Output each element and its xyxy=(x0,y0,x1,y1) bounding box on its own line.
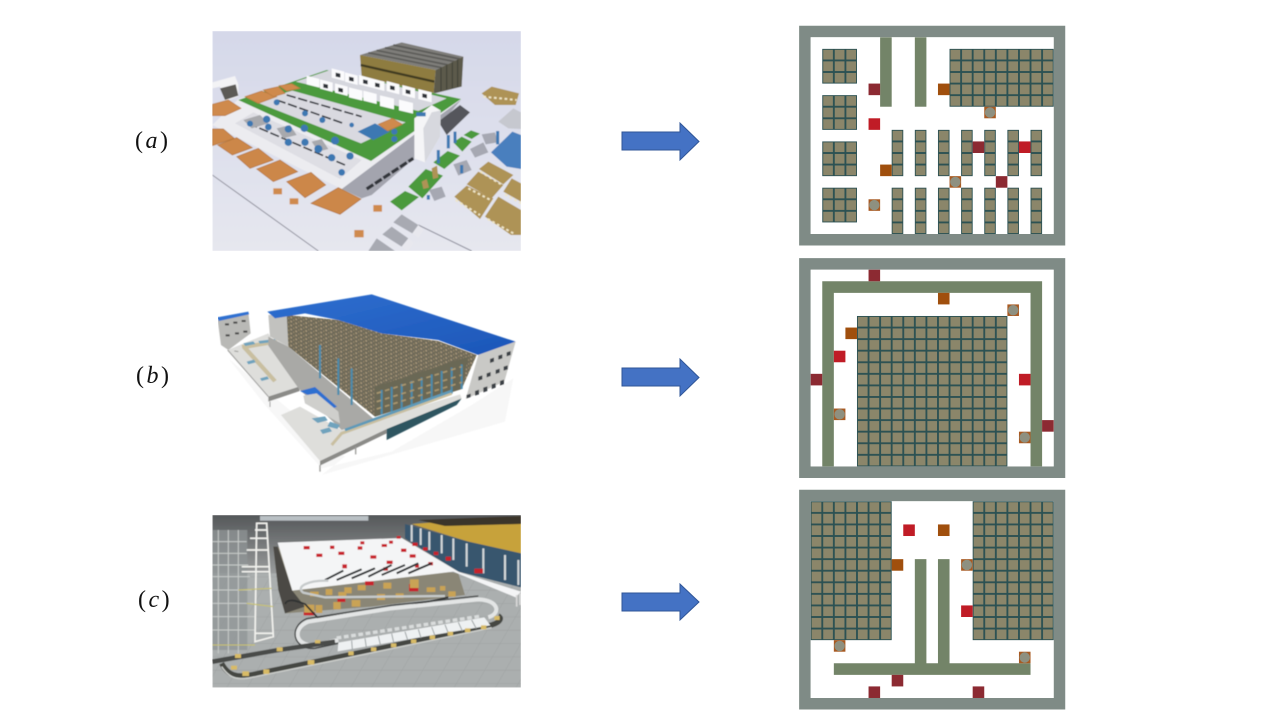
conveyor lines xyxy=(248,95,362,165)
arrow: (a) to map xyxy=(622,123,699,160)
upper shelf columns xyxy=(892,130,1042,176)
red agents xyxy=(903,524,973,617)
blue roof xyxy=(267,294,516,355)
frame xyxy=(799,26,1065,246)
dark red agents xyxy=(869,84,1007,188)
machine area floor xyxy=(296,70,447,111)
lower deck platform xyxy=(281,394,462,472)
rear gable wall xyxy=(268,315,288,347)
blue totes and robots xyxy=(247,99,397,176)
green aisle band xyxy=(238,70,461,161)
conveyor under deck xyxy=(367,158,413,189)
illustration: warehouse (a), multi-level fulfilment centre xyxy=(212,31,521,251)
illustration: warehouse (c), robot sorting floor with conveyor loop xyxy=(212,515,521,688)
platform cast shadow xyxy=(273,547,305,613)
arrow: (c) to map xyxy=(622,584,699,620)
grey pallets xyxy=(498,108,521,129)
grey machinery on strip xyxy=(243,115,328,152)
ground shadow xyxy=(267,383,504,462)
brown agents xyxy=(845,293,950,339)
left office building xyxy=(217,312,251,350)
right column xyxy=(517,593,520,607)
upper sorter slats xyxy=(337,616,482,638)
grid map (a) xyxy=(799,26,1065,246)
tan pallets xyxy=(422,87,521,235)
central shelf block xyxy=(857,316,1007,466)
grid map (b) xyxy=(799,258,1065,478)
arrow: (b) to map xyxy=(622,359,699,396)
white machines xyxy=(307,68,432,114)
large shelf block xyxy=(950,49,1054,107)
blue pallet field xyxy=(491,132,521,169)
goal markers xyxy=(834,559,1031,663)
trucks xyxy=(368,214,424,251)
back-right golden rack xyxy=(405,516,521,587)
red robots xyxy=(304,536,483,615)
white tower xyxy=(414,105,441,162)
floor background xyxy=(212,31,521,251)
red agents xyxy=(869,118,1031,153)
left shelf block xyxy=(811,501,892,640)
white robot platform xyxy=(278,538,521,597)
label: (b): (b) xyxy=(136,363,170,389)
frame xyxy=(799,490,1065,710)
sorting chutes xyxy=(325,563,432,580)
green U-shaped wall xyxy=(822,281,1042,466)
rack aisle cranes xyxy=(320,345,352,405)
orange pallets below deck xyxy=(212,129,361,214)
right shelf block xyxy=(973,501,1054,640)
pallet strapping highlights xyxy=(456,97,521,233)
left shelf blocks xyxy=(822,49,857,222)
work stations xyxy=(429,132,498,201)
road lines xyxy=(212,175,472,251)
end wall with windows xyxy=(466,342,516,399)
front conveyor xyxy=(312,391,452,445)
frame xyxy=(799,258,1065,478)
dark red agents xyxy=(869,675,984,698)
loose pallet carts xyxy=(273,188,382,237)
small office with blue roof xyxy=(300,387,340,423)
lower shelf columns xyxy=(892,188,1042,234)
storage rack mass xyxy=(287,315,477,417)
dark red agents xyxy=(811,270,1054,432)
left loading platform xyxy=(228,333,299,397)
interior floor xyxy=(268,337,375,430)
dark conveyors right of tower xyxy=(438,105,470,135)
packing area floor xyxy=(255,91,406,143)
conveyor belts xyxy=(212,581,500,679)
gate building xyxy=(212,76,238,101)
parcels and stations xyxy=(304,579,456,613)
green walls xyxy=(880,37,926,107)
red agents xyxy=(834,351,1031,385)
back wall xyxy=(212,515,521,582)
goal markers xyxy=(869,107,996,211)
robot strip xyxy=(235,112,362,179)
illustration: warehouse (b), high-bay building with blue roof xyxy=(217,294,516,475)
upper platform deck xyxy=(213,88,460,188)
goal markers xyxy=(834,304,1031,443)
brown agents xyxy=(892,524,950,571)
sorter deck panels xyxy=(338,617,490,651)
blue workers and totes on floor xyxy=(428,131,498,200)
lower floor under platform xyxy=(273,547,465,613)
left conveyor xyxy=(242,339,278,382)
grid map (c) xyxy=(799,490,1065,710)
rack front face xyxy=(375,357,468,417)
tiled floor xyxy=(212,573,521,688)
yellow parcels on belt xyxy=(231,616,500,676)
orange pallets on deck edge xyxy=(212,84,402,131)
label: (a): (a) xyxy=(135,128,170,154)
label: (c): (c) xyxy=(138,587,171,613)
area below deck xyxy=(342,99,462,198)
brown agents xyxy=(880,84,950,176)
sorter gap lines xyxy=(352,620,476,649)
green T-shaped walls xyxy=(834,559,1031,675)
storage rack cube xyxy=(360,42,463,94)
green floor patches xyxy=(390,130,480,210)
left scaffold racks xyxy=(212,523,273,653)
